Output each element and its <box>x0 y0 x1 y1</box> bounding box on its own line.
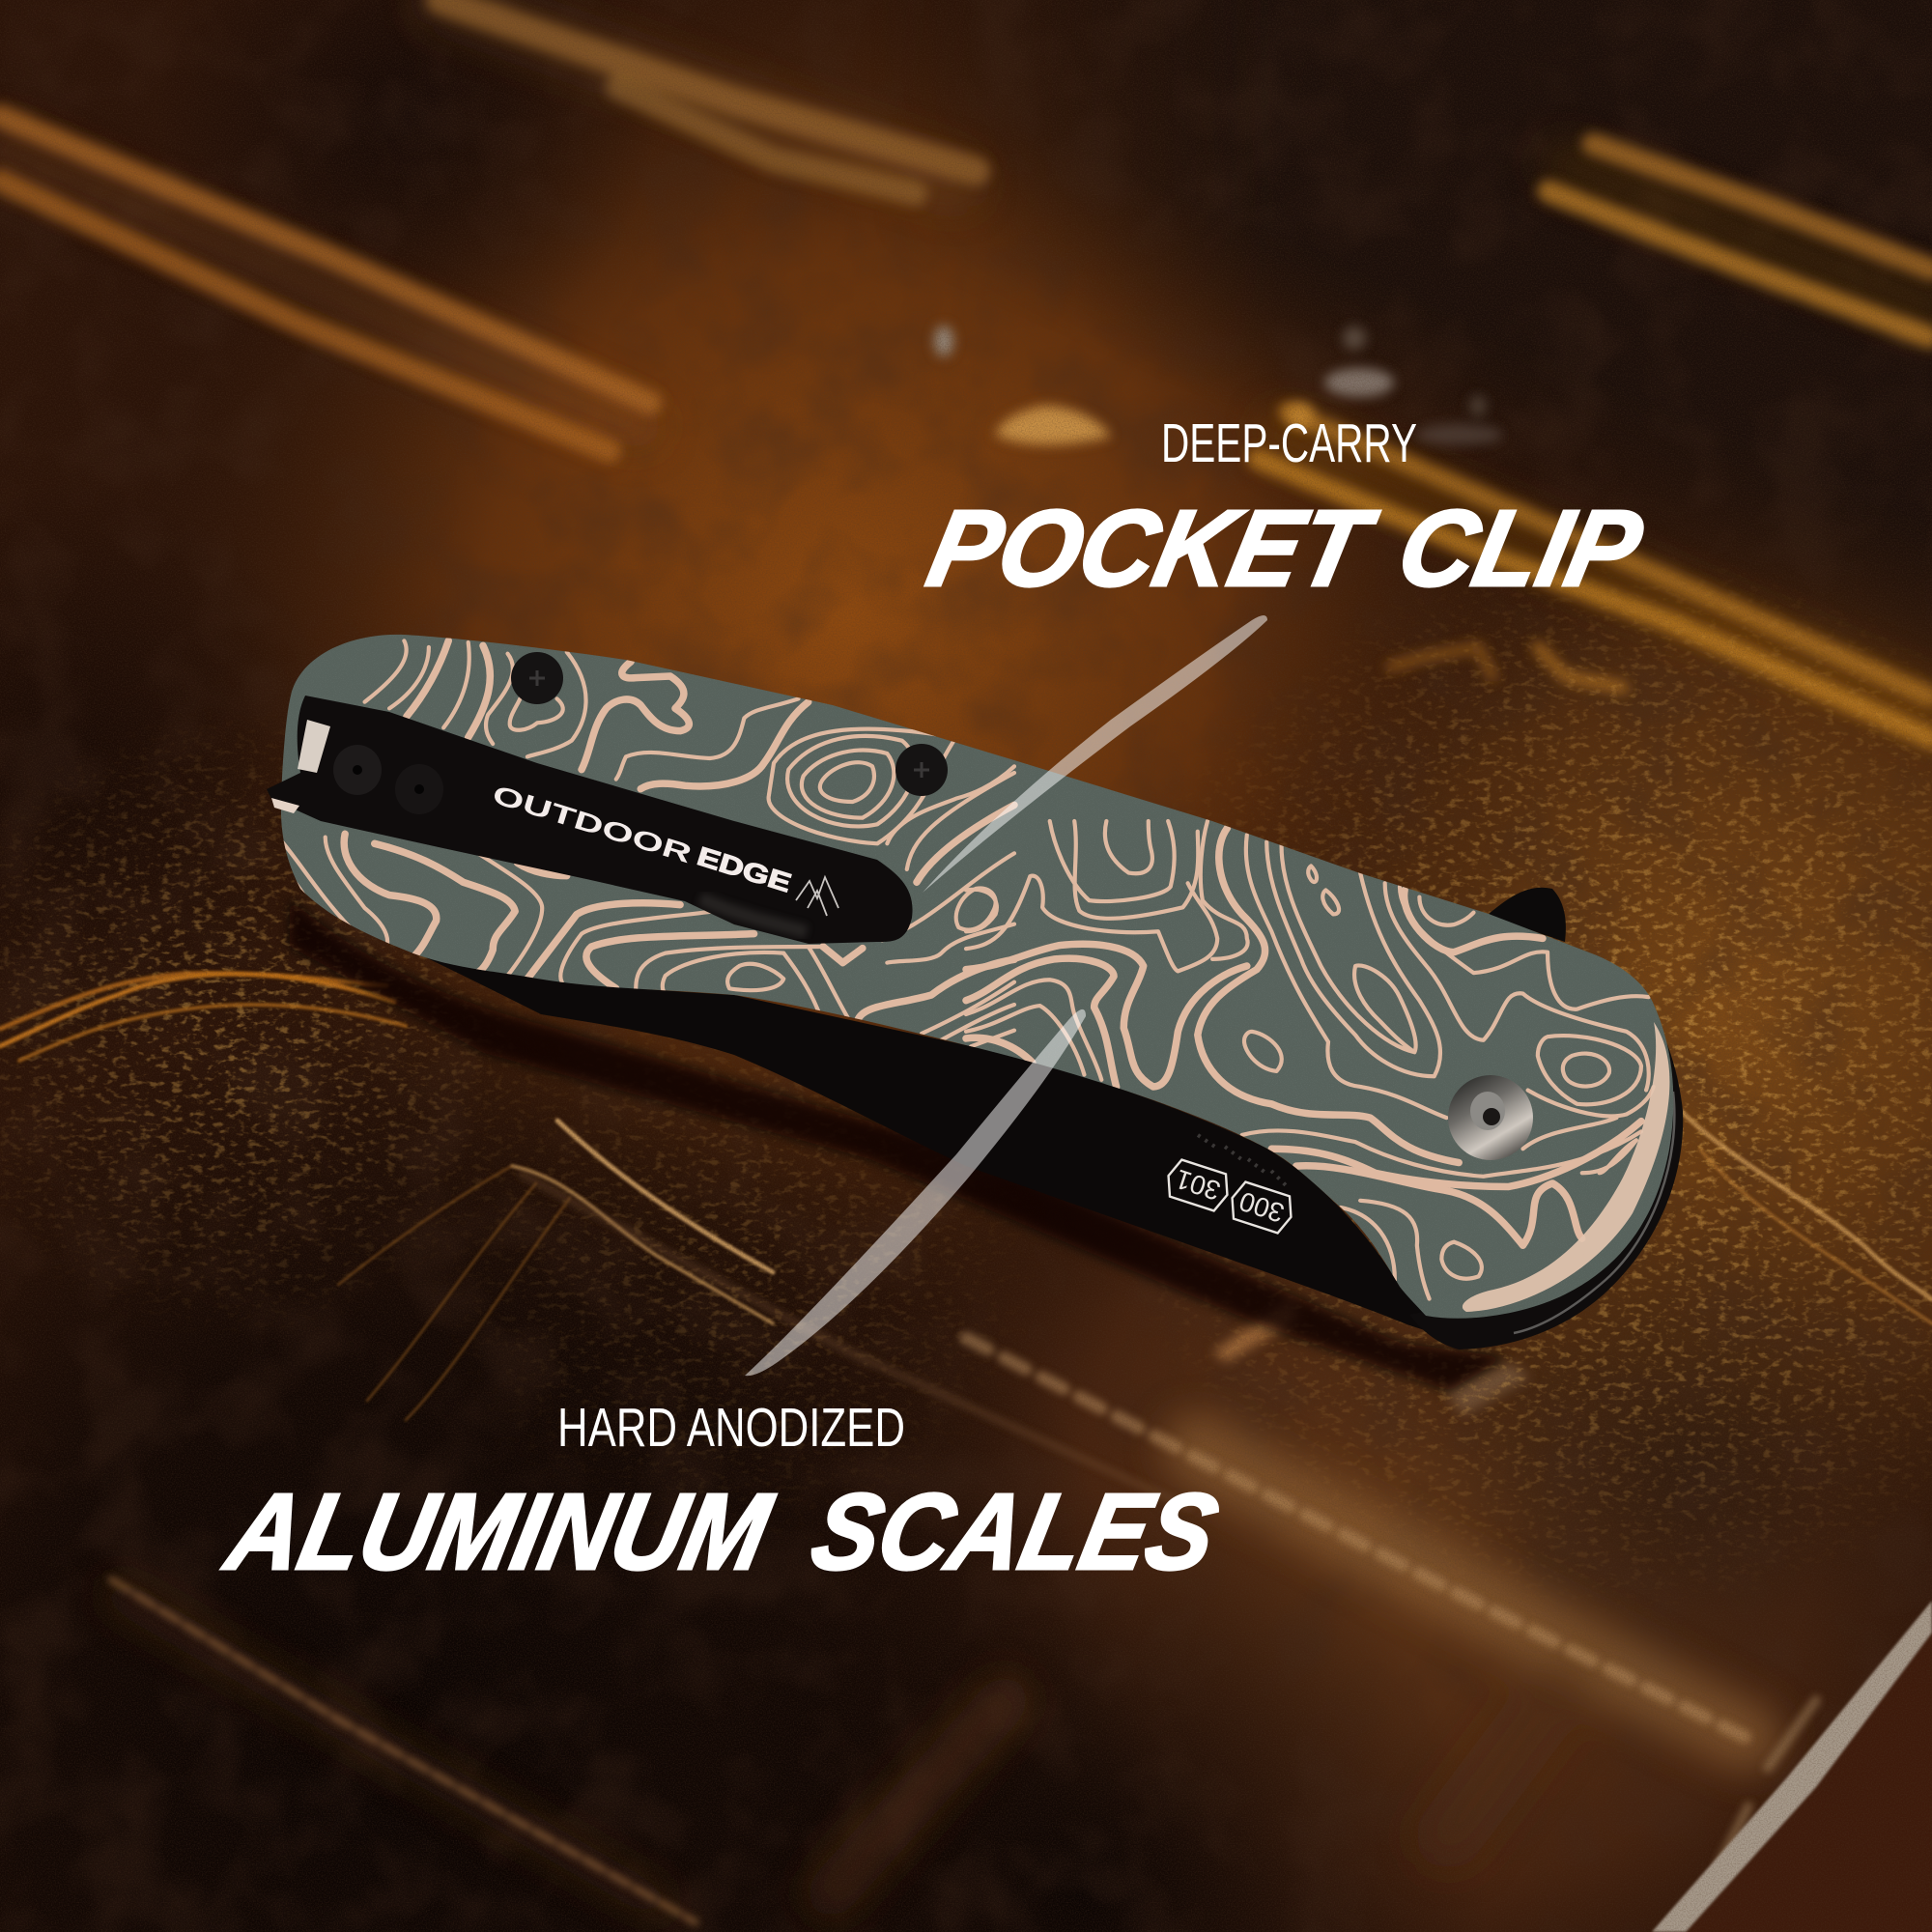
heading: aluminum scales: ALUMINUM SCALES <box>215 1470 1228 1592</box>
handle scale <box>270 618 1700 1333</box>
callout line: pocket clip <box>923 615 1267 893</box>
clip logo: OUTDOOR <box>489 780 695 868</box>
clip body <box>267 696 913 944</box>
pocket clip <box>267 696 913 944</box>
knife <box>267 618 1700 1391</box>
blade <box>413 952 1449 1338</box>
clip logo <box>489 780 838 916</box>
label: hard anodized: HARD ANODIZED <box>557 1397 905 1459</box>
heading: pocket clip: POCKET CLIP <box>919 487 1652 609</box>
clip pivot post <box>298 720 330 773</box>
clip logo: EDGE <box>694 841 795 897</box>
label: deep-carry: DEEP-CARRY <box>1161 412 1417 474</box>
handle screw top middle <box>895 744 948 796</box>
knife shadow <box>290 898 1507 1391</box>
background: stitching lines <box>0 0 1932 1415</box>
flipper tab <box>1489 888 1566 942</box>
background: worn blobs and pale flecks <box>934 326 1531 1415</box>
clip end tab <box>271 798 299 813</box>
contour lines: left half <box>281 640 1014 1046</box>
pivot screw <box>1448 1075 1533 1160</box>
scratched leather band left <box>0 973 1932 1420</box>
handle screw top left <box>511 652 563 704</box>
badge 300: 300 <box>1236 1186 1288 1228</box>
background: worn scuffs and lower stitching <box>0 592 1932 1932</box>
badge 301: 301 <box>1172 1164 1224 1206</box>
clip highlight <box>700 898 807 932</box>
blade thumb serrations <box>1198 1135 1287 1186</box>
clip mounting screws <box>333 745 443 814</box>
callout line: aluminum scales <box>745 1009 1086 1376</box>
handle edge highlight crescent <box>1463 1022 1669 1312</box>
handle edge liner <box>1409 955 1683 1350</box>
leather edge band and corner <box>1686 1633 1932 1932</box>
steel stamp badges <box>1162 1157 1297 1236</box>
contour lines: right half <box>966 821 1654 1299</box>
